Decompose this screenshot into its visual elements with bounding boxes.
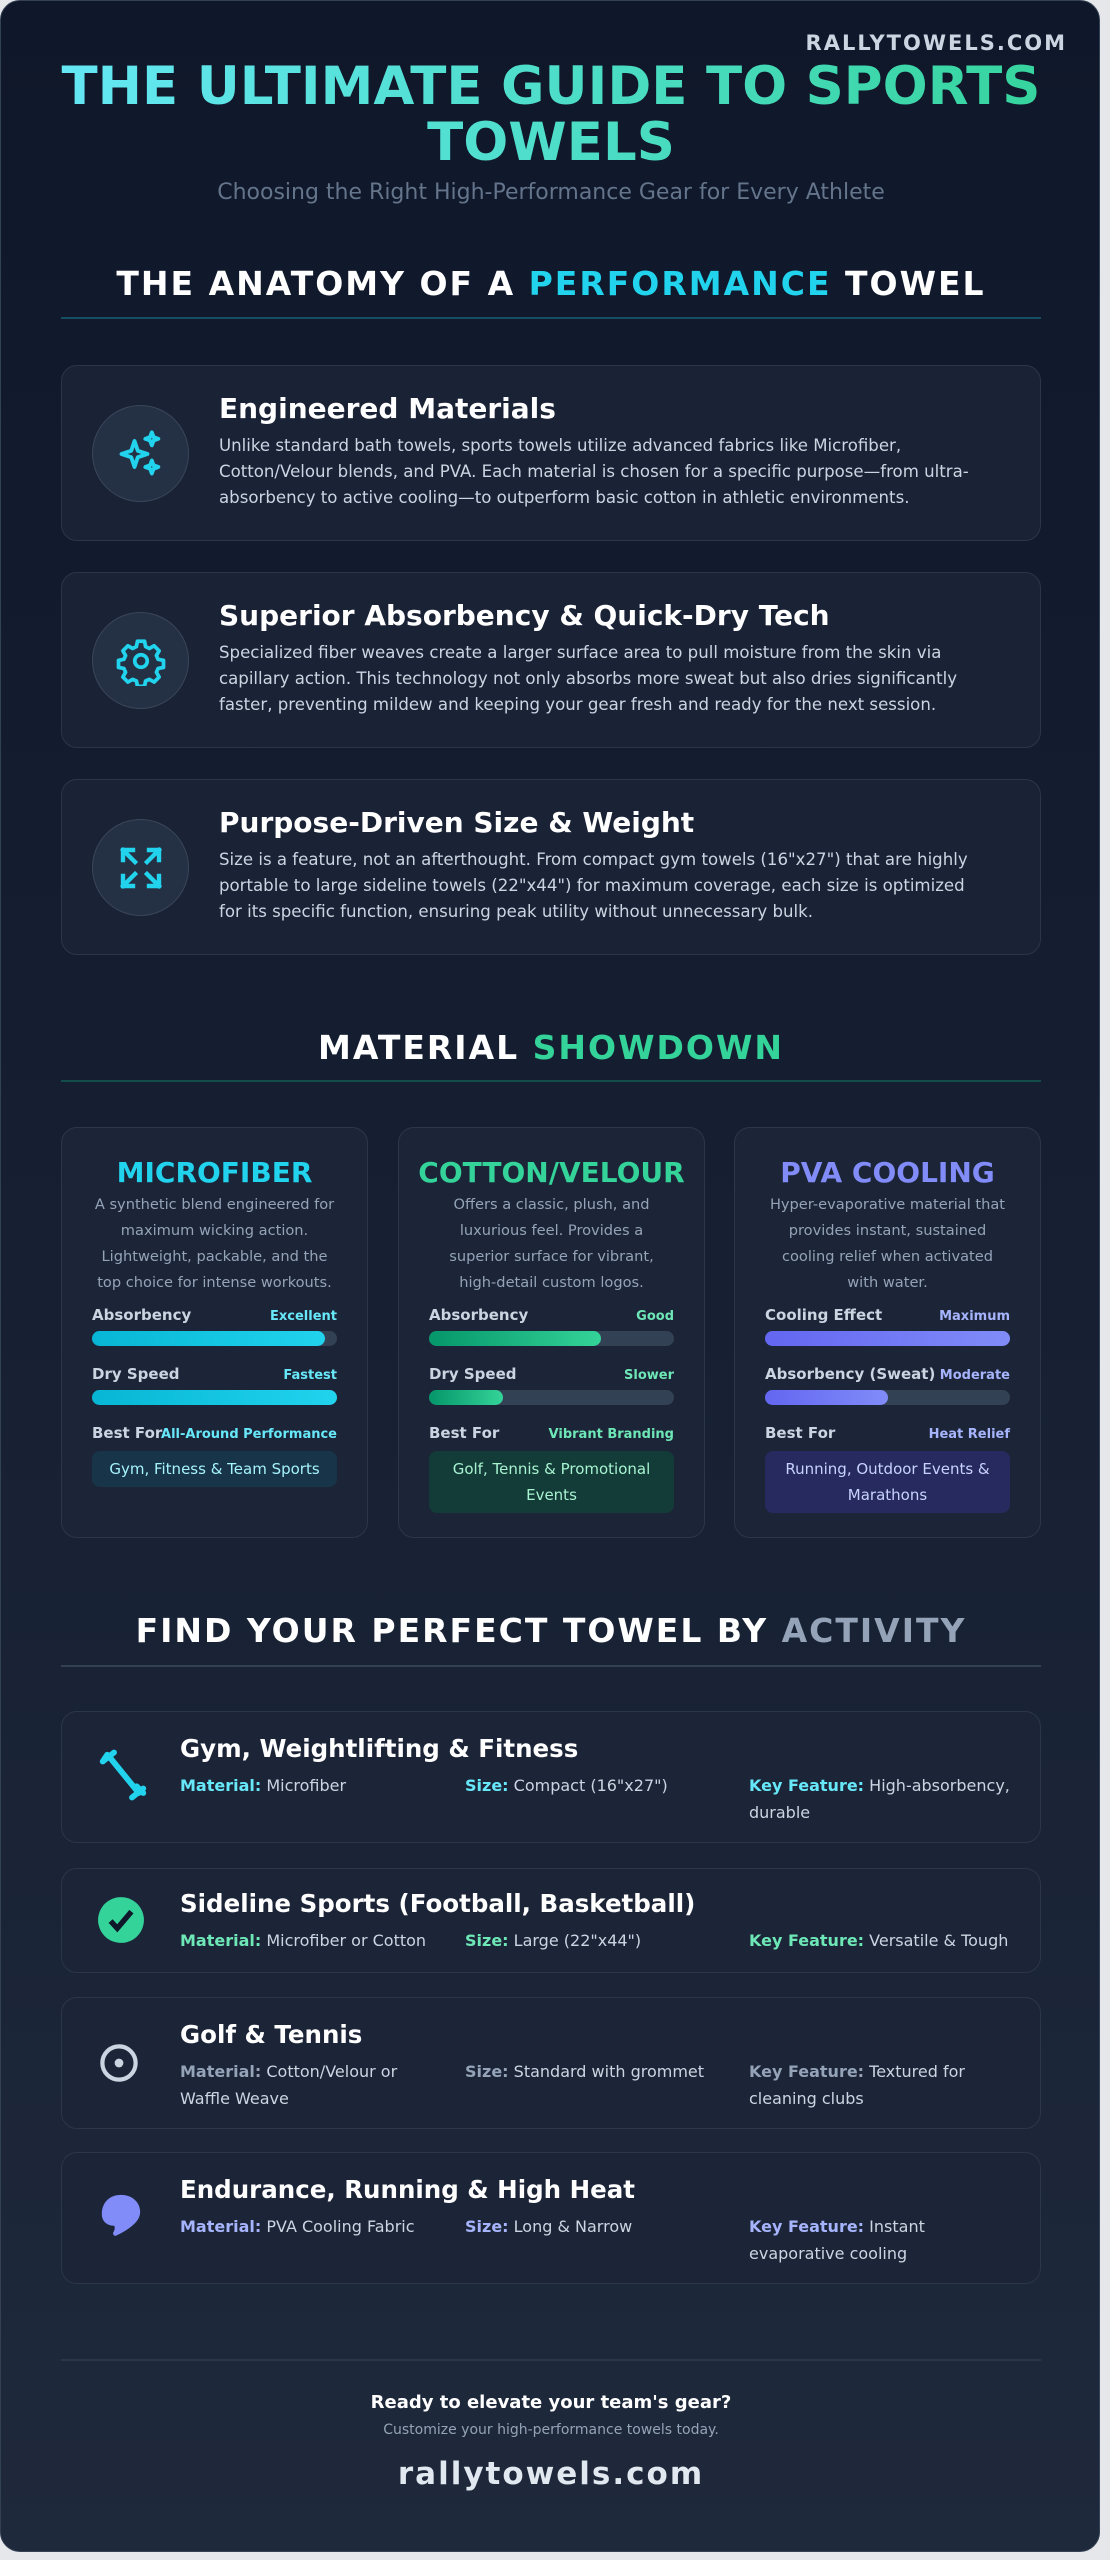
- panel: size: [61, 779, 1041, 955]
- panel: endurance: [61, 2152, 1041, 2284]
- panel: absorbency: [61, 572, 1041, 748]
- footer: [371, 2392, 731, 2492]
- footer: Customize your high-performance towels today.: [383, 2422, 719, 2438]
- panel: cotton: Best For: [429, 1424, 499, 1442]
- panel: microfiber: Best For: [92, 1424, 162, 1442]
- panel: cotton: Offers a classic, plush, and luxurious feel. Provides a superior surface for vibrant, high-detail custom logos.: [449, 1196, 654, 1291]
- panel: gym: Material: Microfiber: [180, 1776, 346, 1795]
- panel: microfiber: All-Around Performance: [161, 1427, 337, 1442]
- panel: endurance: Endurance, Running & High Heat: [180, 2175, 635, 2204]
- panel: sideline: Sideline Sports (Football, Basketball): [180, 1889, 695, 1918]
- panel: pva: Running, Outdoor Events & Marathons: [785, 1460, 990, 1504]
- panel: pva: Hyper-evaporative material that provides instant, sustained cooling relief when activated with water.: [770, 1196, 1005, 1291]
- panel: pva: Absorbency (Sweat): [765, 1365, 935, 1383]
- panel: gym: [61, 1711, 1041, 1843]
- panel: gym: Size: Compact (16"x27"): [465, 1776, 668, 1795]
- panel: cotton: Dry Speed: [429, 1365, 516, 1383]
- text: Size is a feature, not an afterthought. From compact gym towels (16"x27") that are highly portable to large sideline towels (22"x44") for maximum coverage, each size is optimized for its specific function, ensuring peak utility without unnecessary bulk.: [219, 850, 968, 921]
- panel: sideline: Size: Large (22"x44"): [465, 1931, 641, 1950]
- heading: Superior Absorbency & Quick-Dry Tech: [219, 599, 830, 632]
- panel: cotton: COTTON/VELOUR: [418, 1156, 685, 1189]
- panel: gym: Key Feature: High-absorbency, durable: [749, 1776, 1010, 1822]
- icon: check circle: [98, 1897, 144, 1943]
- panel: pva: PVA COOLING: [780, 1156, 995, 1189]
- panel: endurance: Key Feature: Instant evaporative cooling: [749, 2217, 925, 2263]
- panel: microfiber: Dry Speed: [92, 1365, 179, 1383]
- heading: Engineered Materials: [219, 392, 556, 425]
- panel: cotton: [398, 1127, 705, 1538]
- panel: golf: [61, 1997, 1041, 2129]
- heading: anatomy: THE ANATOMY OF A PERFORMANCE TOWEL: [116, 264, 986, 303]
- panel: golf: Size: Standard with grommet: [465, 2062, 704, 2081]
- footer: rallytowels.com: [398, 2456, 704, 2492]
- icon: gear: [92, 612, 189, 709]
- panel: microfiber: [61, 1127, 368, 1538]
- title: TOWELS: [427, 112, 675, 173]
- panel: cotton: Golf, Tennis & Promotional Events: [453, 1460, 650, 1504]
- panel: golf: Material: Cotton/Velour or Waffle Weave: [180, 2062, 397, 2108]
- panel: endurance: Size: Long & Narrow: [465, 2217, 632, 2236]
- panel: sideline: Key Feature: Versatile & Tough: [749, 1931, 1008, 1950]
- panel: pva: Moderate: [940, 1368, 1010, 1383]
- panel: cotton: Vibrant Branding: [549, 1427, 674, 1442]
- panel: cotton: Absorbency: [429, 1306, 528, 1324]
- text: Unlike standard bath towels, sports towels utilize advanced fabrics like Microfiber, Cotton/Velour blends, and PVA. Each material is chosen for a specific purpose—from ultra-absorbency to active cooling—to outperform basic cotton in athletic environments.: [219, 436, 969, 507]
- panel: pva: Maximum: [939, 1309, 1010, 1324]
- icon: expand arrows: [92, 819, 189, 916]
- panel: gym: Gym, Weightlifting & Fitness: [180, 1734, 578, 1763]
- icon: sparkles: [92, 405, 189, 502]
- panel: golf: Golf & Tennis: [180, 2020, 362, 2049]
- panel: pva: Heat Relief: [929, 1427, 1010, 1442]
- panel: endurance: Material: PVA Cooling Fabric: [180, 2217, 415, 2236]
- panel: microfiber: Absorbency: [92, 1306, 191, 1324]
- panel: sideline: Material: Microfiber or Cotton: [180, 1931, 426, 1950]
- panel: cotton: Good: [636, 1309, 674, 1324]
- icon: drop: [102, 2194, 140, 2236]
- heading: activity: FIND YOUR PERFECT TOWEL BY ACTIVITY: [136, 1611, 966, 1650]
- footer: Ready to elevate your team's gear?: [371, 2392, 731, 2413]
- icon: dumbbell: [100, 1750, 146, 1800]
- panel: engineered materials: [61, 365, 1041, 541]
- title: THE ULTIMATE GUIDE TO SPORTS: [62, 56, 1040, 117]
- panel: microfiber: A synthetic blend engineered for maximum wicking action. Lightweight, packable, and the top choice for intense workouts.: [95, 1196, 334, 1291]
- text: Specialized fiber weaves create a larger surface area to pull moisture from the skin via capillary action. This technology not only absorbs more sweat but also dries significantly faster, preventing mildew and keeping your gear fresh and ready for the next session.: [219, 643, 957, 714]
- panel: microfiber: Excellent: [270, 1309, 337, 1324]
- panel: golf: Key Feature: Textured for cleaning clubs: [749, 2062, 965, 2108]
- icon: target: [100, 2044, 138, 2082]
- panel: pva: Cooling Effect: [765, 1306, 882, 1324]
- panel: microfiber: MICROFIBER: [117, 1156, 312, 1189]
- panel: microfiber: Gym, Fitness & Team Sports: [109, 1460, 320, 1478]
- panel: pva: Best For: [765, 1424, 835, 1442]
- panel: cotton: Slower: [624, 1368, 674, 1383]
- subtitle: Choosing the Right High-Performance Gear for Every Athlete: [217, 180, 885, 205]
- brand tag: RALLYTOWELS.COM: [806, 31, 1067, 55]
- heading: Purpose-Driven Size & Weight: [219, 806, 694, 839]
- panel: microfiber: Fastest: [283, 1368, 337, 1383]
- heading: showdown: MATERIAL SHOWDOWN: [318, 1028, 784, 1067]
- panel: pva: [734, 1127, 1041, 1538]
- title: [1, 59, 1101, 171]
- panel: sideline: [61, 1868, 1041, 1973]
